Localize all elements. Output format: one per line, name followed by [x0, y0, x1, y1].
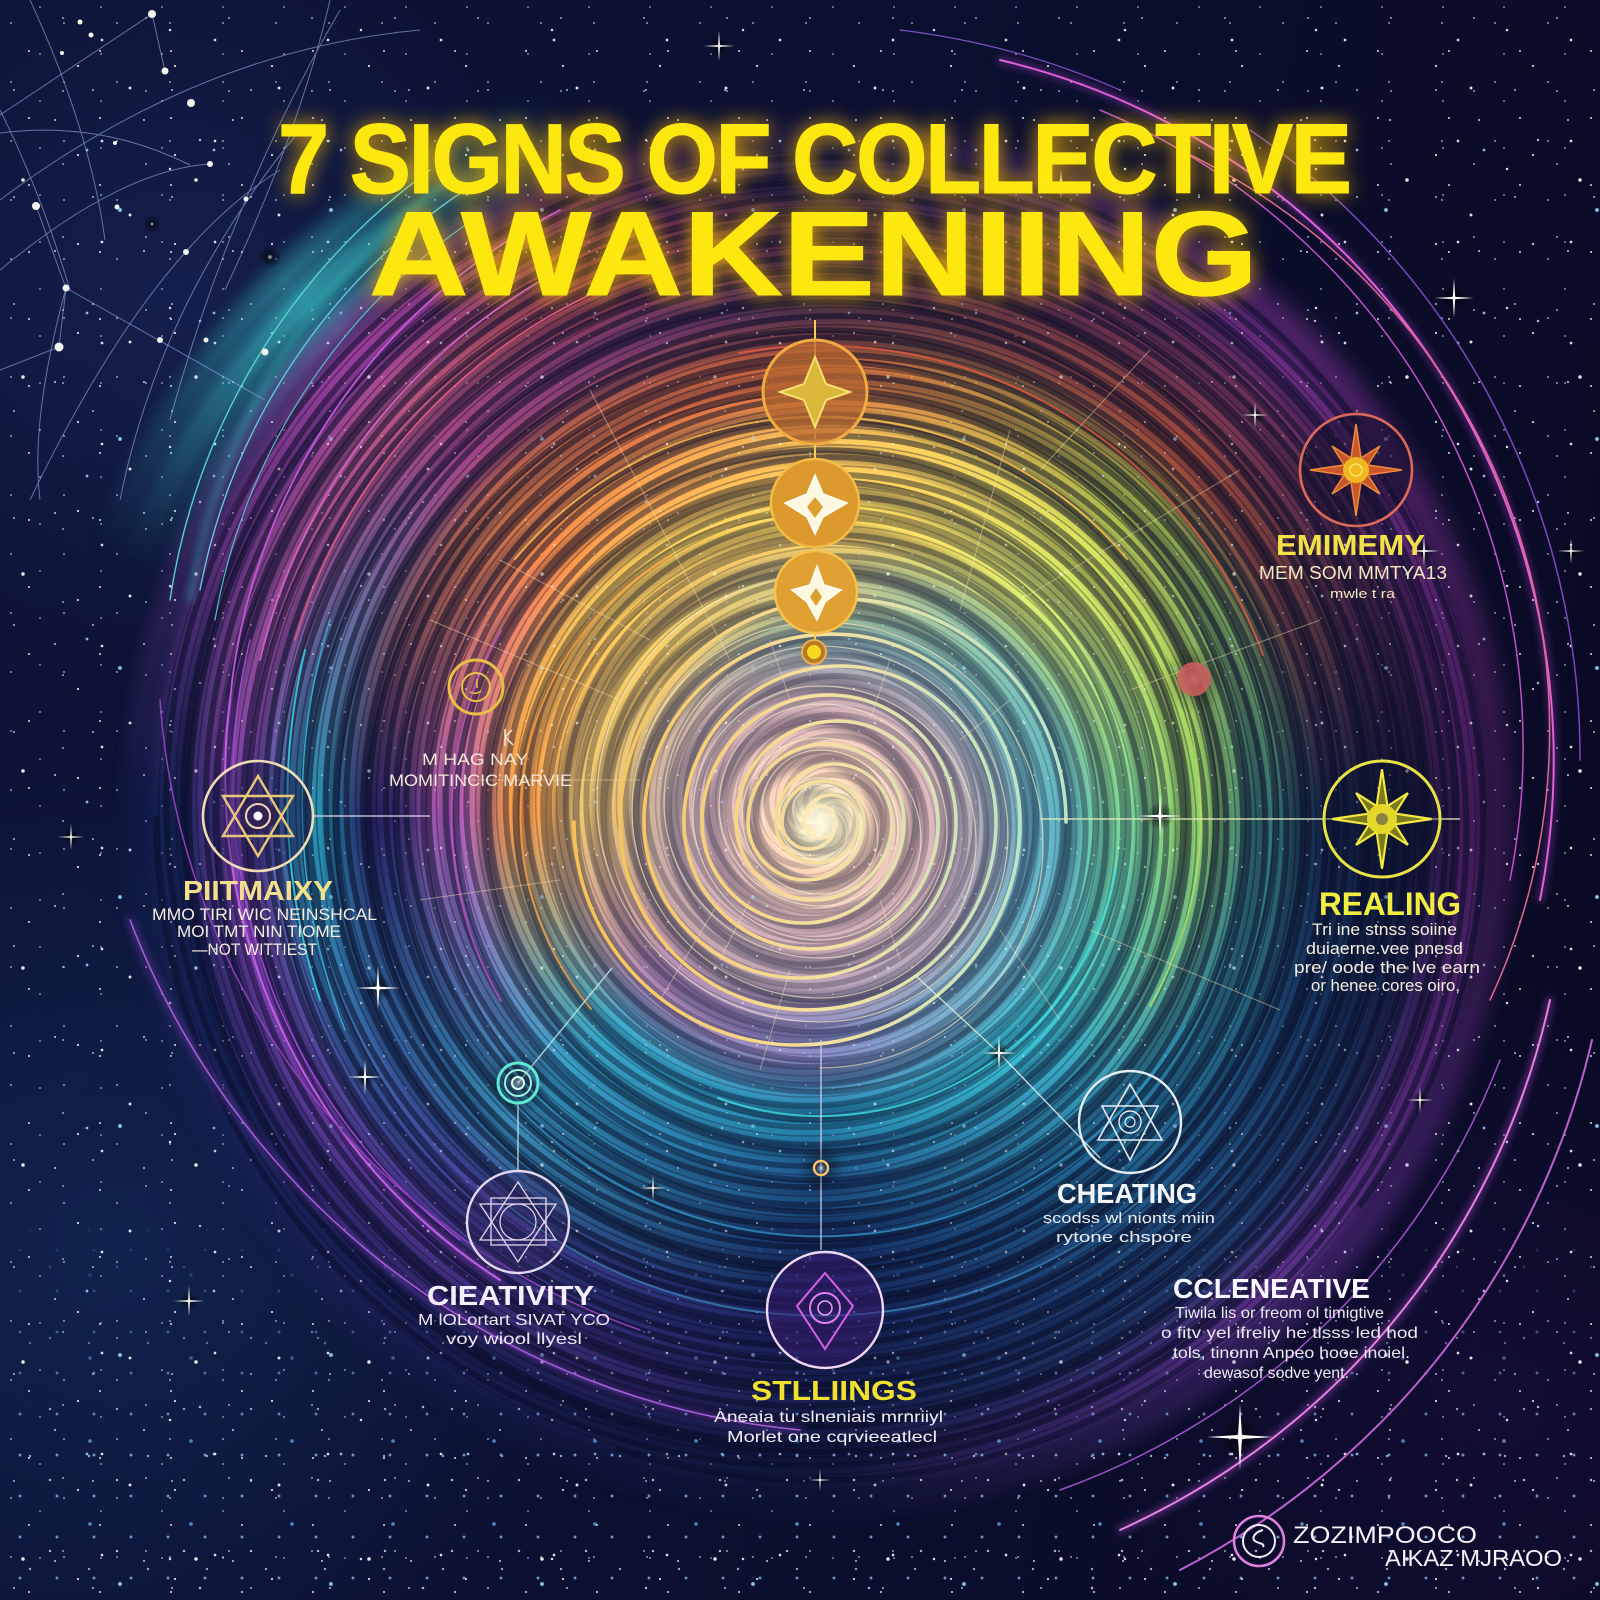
body text: Morlet one cqrvieeatlecl: [727, 1429, 937, 1446]
icon: small gold ring: [449, 660, 503, 714]
text: small sign caption: MOMITINCIC MARVIE: [389, 771, 572, 790]
constellation lines and nodes, top left: [0, 0, 420, 500]
heading: CCLENEATIVE: [1173, 1273, 1370, 1304]
body text: [1043, 1210, 1215, 1246]
heading: REALING: [1319, 886, 1461, 922]
logo: [1234, 1516, 1562, 1571]
icon: orange sun star: [1300, 414, 1412, 526]
faint spiral grid spokes: [420, 350, 1320, 1070]
heading: CIEATIVITY: [427, 1280, 594, 1311]
body text: tols, tinonn Anpeo hooe inoiel.: [1173, 1345, 1410, 1362]
sign: Ccleneative: [1161, 1273, 1418, 1382]
glowing node: teal: [484, 1049, 552, 1117]
icon: triangle and square circle: [467, 1171, 569, 1273]
body text: [1259, 563, 1447, 601]
icon: small gold dot: [802, 640, 826, 664]
body text: mwle t ra: [1330, 586, 1396, 601]
title: 7 SIGNS OF COLLECTIVE: [278, 105, 1352, 215]
bright coloured spiral arcs: [451, 346, 1263, 1316]
body text: duiaerne.vee pnesd: [1306, 939, 1463, 958]
body text: o fitv yel ifreliy he tlsss led hod: [1161, 1325, 1418, 1342]
sign: Cieativity: [418, 1171, 610, 1348]
sign: Stilliings: [714, 1252, 943, 1446]
body text: pre/ oode the lve earn: [1294, 958, 1480, 977]
body text: [152, 905, 377, 959]
title: [278, 105, 1352, 321]
sign: Realing: [1294, 761, 1480, 995]
chakra column: three gold circles: [763, 320, 867, 664]
sign: Cheating: [1043, 1071, 1215, 1246]
central swirl: [574, 576, 1066, 1068]
body text: MOI TMT NIN TIOME: [177, 922, 341, 941]
body text: [1294, 920, 1480, 995]
logo text: AIKAZ MJRAOO: [1385, 1545, 1562, 1571]
logo text: ZOZIMPOOCO: [1293, 1522, 1477, 1549]
body text: scodss wl nionts miin: [1043, 1210, 1215, 1227]
text: small sign caption: [389, 750, 572, 790]
heading: PIITMAIXY: [183, 875, 333, 906]
body text: rytone chspore: [1056, 1229, 1192, 1246]
body text: dewasof sodve yent.: [1204, 1365, 1349, 1382]
body text: [714, 1409, 943, 1446]
heading: EMIMEMY: [1276, 530, 1425, 562]
body text: —NOT WITTIEST: [192, 940, 317, 959]
icon: logo ring: [1234, 1516, 1284, 1566]
body text: or henee cores oiro,: [1311, 976, 1460, 995]
body text: voy wiool llyesl: [446, 1331, 582, 1348]
glowing node: pale green: [981, 1035, 1017, 1071]
icon: white hexagram circle: [1079, 1071, 1181, 1173]
body text: [418, 1312, 610, 1348]
body text: MMO TIRI WIC NEINSHCAL: [152, 905, 377, 924]
body text: M lOLortart SIVAT YCO: [418, 1312, 610, 1329]
glowing node: pink orange: [797, 1144, 845, 1192]
brighter stars along the bottom: [18, 1229, 1592, 1580]
body text: Tri ine stnss soiine: [1312, 920, 1457, 939]
icon: middle gold circle: [771, 459, 859, 547]
sign: small circle upper left: [389, 660, 572, 790]
title: AWAKENIING: [369, 187, 1258, 321]
icon: yellow sun star: [1324, 761, 1440, 877]
small marker glyph: [505, 729, 513, 746]
heading: CHEATING: [1057, 1178, 1197, 1209]
spiral: rainbow colour bands: [120, 112, 1520, 1512]
icon: purple diamond circle: [767, 1252, 883, 1368]
spiral: dark gaps forming the spiral line texture: [153, 151, 1487, 1483]
sign: Emimemy: [1259, 414, 1447, 601]
body text: Tiwila lis or freom ol timigtive: [1175, 1305, 1384, 1322]
icon: top orange circle: [763, 340, 867, 444]
text: small sign caption: M HAG NAY: [422, 750, 528, 769]
logo text: [1293, 1522, 1562, 1571]
horizontal axis and connector lines: [313, 816, 1460, 1250]
body text: [1161, 1305, 1418, 1382]
body text: Aneaia tu slneniais mrnriiyl: [714, 1409, 943, 1426]
salmon planet orb: [1160, 645, 1228, 713]
heading: STLLIINGS: [751, 1375, 917, 1406]
sign: Piitmaixy: [152, 761, 377, 959]
body text: MEM SOM MMTYA13: [1259, 563, 1447, 583]
icon: lower gold circle: [775, 551, 857, 633]
icon: hexagram circle: [203, 761, 313, 871]
